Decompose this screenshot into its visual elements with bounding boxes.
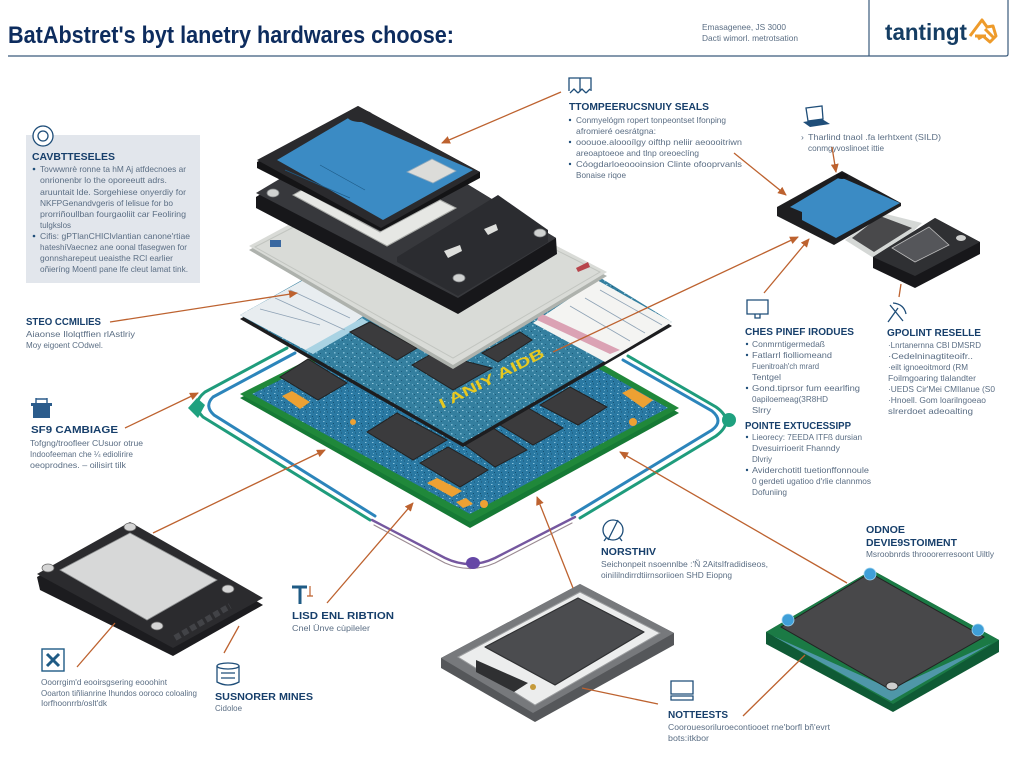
line: Cnel Ünve cùpileler xyxy=(292,623,370,633)
title: BatAbstret's byt lanetry hardwares choose: xyxy=(8,22,454,49)
SSD mid section xyxy=(845,213,922,262)
lines: Seichonpeit nsoennlbe :'Ñ 2AitsIfradidiseos, xyxy=(601,559,768,569)
bolts xyxy=(267,189,546,282)
text block: SSD note xyxy=(801,106,941,153)
bullets: 0apiloemeag(3R8HD xyxy=(752,394,828,404)
heading: GPOLINT RESELLE xyxy=(887,328,981,339)
text block: notes xyxy=(668,681,831,743)
bullets: Conmyelógm ropert tonpeontset Ifonping xyxy=(576,115,726,125)
panel: causes xyxy=(26,126,200,283)
text block: chip product xyxy=(745,300,860,415)
white pin xyxy=(886,682,898,690)
housing labels xyxy=(484,224,498,235)
panel bullet text: hateshiVaecnez ane oonal tfasegwen for xyxy=(40,242,187,252)
bullets: Cóogdarloeoooinsion Clinte ofooprvanls xyxy=(576,159,742,169)
lines xyxy=(26,329,136,350)
leader arrows xyxy=(77,92,901,716)
layer: blue cover xyxy=(257,106,480,231)
note text: › xyxy=(801,132,804,142)
wiring loop xyxy=(188,348,736,569)
bullets xyxy=(569,115,742,180)
lines: oeoprodnes. – oilisirt tilk xyxy=(30,460,127,470)
bullets: ooouoe.aloooílgy oifthp neliir aeoooitriwn xyxy=(576,137,742,147)
layer: sheet with printed data xyxy=(240,191,672,447)
header note: Dacti wimorl. metrotsation xyxy=(702,33,798,43)
text block: temperature seals xyxy=(569,78,742,180)
icon: dial xyxy=(603,520,623,541)
icon: storage drum xyxy=(217,663,239,685)
lines: Ooorrgim'd eooirsgsering eooohint xyxy=(41,677,168,687)
heading: ODNOE xyxy=(866,525,905,536)
bullets: Tentgel xyxy=(752,372,781,382)
lines: Coorouesoriluroecontiooet rne'borfl bñ'evrt xyxy=(668,722,831,732)
note text: conmgyvoslinoet ittie xyxy=(808,143,884,153)
bullets: afromieré oesrátgna: xyxy=(576,126,656,136)
lines: Tofgng/troofleer CUsuor otrue xyxy=(30,438,143,448)
icon: laptop outline xyxy=(671,681,693,700)
icon: sensor xyxy=(33,126,53,146)
icon: laptop xyxy=(803,106,830,127)
lines: Iorfhoonrrb/oslt'dk xyxy=(41,698,108,708)
lines: ·Cedelninagtiteoifr.. xyxy=(888,351,973,361)
panel bullet text: tulgkslos xyxy=(40,220,71,230)
bullets: 0 gerdeti ugatioo d'rlie clannmos xyxy=(752,476,871,486)
text block: USD end ribbon xyxy=(292,586,394,633)
panel bullet text: oñieríng Moentl pane lfe cleut lamat tink. xyxy=(40,264,188,274)
layer: dark housing xyxy=(256,125,557,314)
logo: tantingt xyxy=(885,19,967,45)
lines: ·UEDS Cir'Mei CMIlanue (S0 xyxy=(888,384,995,394)
lines: Aiaonse Ilolqtffien rlAstlriy xyxy=(26,329,136,339)
lines: Ooarton tiñlianrine Ihundos ooroco coloaling xyxy=(41,688,197,698)
header note: Emasagenee, JS 3000 xyxy=(702,22,786,32)
heading: CHES PINEF IRODUES xyxy=(745,327,854,338)
lines: Moy eigoent COdwel. xyxy=(26,340,103,350)
icon: gauge book xyxy=(569,78,591,93)
printed label: I ANIY AIDB xyxy=(436,345,547,412)
layer: circuit board xyxy=(240,283,679,528)
text block: SPD change xyxy=(30,398,143,470)
heading line two: DEVIE9STOIMENT xyxy=(866,538,957,549)
bullets: Gond.tiprsor fum eearlfing xyxy=(752,383,860,393)
SSD dark box xyxy=(873,218,980,288)
panel bullet text xyxy=(33,164,190,274)
heading: SUSNORER MINES xyxy=(215,692,313,703)
heading: LISD ENL RIBTION xyxy=(292,611,394,622)
panel bullet text: prorriñoullban fourgaoliit car Feoliring xyxy=(40,209,186,219)
icon: T tool xyxy=(292,586,313,604)
text block: ground reseller xyxy=(887,303,995,416)
heading: POINTE EXTUCESSIPP xyxy=(745,421,851,432)
lines xyxy=(30,438,143,470)
panel bullet text: NKFPGenandvgeris of lelisue for bo xyxy=(40,198,173,208)
lines: slrerdoet adeoalting xyxy=(888,406,973,416)
wire node: green right xyxy=(722,413,736,427)
blue pins xyxy=(782,568,984,636)
lines xyxy=(601,559,768,580)
heading: SF9 CAMBIAGE xyxy=(31,425,118,436)
bullets: Bonaise riqoe xyxy=(576,170,626,180)
bullets: Dofuniing xyxy=(752,487,787,497)
panel heading: CAVBTTESELES xyxy=(32,152,115,163)
drive label xyxy=(476,660,528,692)
bullets: Fuenitroah'ch mrard xyxy=(752,361,819,371)
bullets xyxy=(746,339,860,415)
lines: Indoofeeman che ¼ ediolirire xyxy=(30,449,133,459)
heading: TTOMPEERUCSNUIY SEALS xyxy=(569,102,709,113)
lines: ·eilt ignoeoitmord (RM xyxy=(888,362,968,372)
lines: bots:itkbor xyxy=(668,733,709,743)
lines xyxy=(668,722,831,743)
orange components xyxy=(282,388,653,508)
heading: STEO CCMILIES xyxy=(26,317,101,328)
icon: toolbox xyxy=(31,398,52,418)
layer: grey plate xyxy=(249,165,607,369)
lines: ·Hnoell. Gom loarilngoeao xyxy=(888,395,986,405)
bullets: Lieorecy: 7EEDA ITFß dursian xyxy=(752,432,862,442)
wire node: green left xyxy=(188,398,205,418)
bullets: Fatlarrl fiolliomeand xyxy=(752,350,832,360)
lower-right chip module xyxy=(766,568,999,712)
text block: northiv xyxy=(601,520,768,580)
panel bullet text: onrionenbr lo the oporeeutt adrs. xyxy=(40,175,167,185)
bullets: Dlvriy xyxy=(752,454,773,464)
plate marks xyxy=(270,240,281,247)
lower-left SSD xyxy=(37,522,263,656)
panel bullet text: Cifis: gPTlanCHIClvlantian canone'rtiae xyxy=(40,231,190,241)
lines xyxy=(41,677,197,708)
note text: Tharlind tnaol .fa lerhtxent (SILD) xyxy=(808,132,941,142)
panel bullet text: Tovwwnrè ronne ta hM Aj atfdecnoes ar xyxy=(40,164,186,174)
bullets xyxy=(746,432,871,497)
lines: Foilmgoaring tlalandter xyxy=(888,373,976,383)
text block: office development xyxy=(866,525,995,559)
chips on board xyxy=(280,359,607,487)
header note xyxy=(702,22,798,43)
lines xyxy=(888,340,995,416)
lower-centre drive xyxy=(441,584,674,722)
wire node: purple xyxy=(466,557,480,569)
text block: point excess xyxy=(745,421,871,497)
text block: sensor mines xyxy=(215,663,313,713)
line: Cidoloe xyxy=(215,703,242,713)
icon: pick xyxy=(888,303,906,322)
lines: ·Lnrtanernna CBI DMSRD xyxy=(888,340,981,350)
text block: tools note xyxy=(41,649,197,708)
bullets: Conmrntigermedaß xyxy=(752,339,825,349)
note text xyxy=(801,132,941,153)
SSD blue cover xyxy=(777,171,901,245)
icon: tools xyxy=(42,649,64,671)
bullets: areoaptoeoe and tlnp oreoeclíng xyxy=(576,148,699,158)
header xyxy=(8,0,1008,56)
bullets: Aviderchotitl tuetionffonnoule xyxy=(752,465,869,475)
bullets: Slrry xyxy=(752,405,772,415)
small assembled SSD xyxy=(777,171,980,288)
chips on sheet xyxy=(350,322,532,390)
line: Msroobnrds throoorerresoont Uiltly xyxy=(866,549,995,559)
lines: oiniIilndirrdtiirnsoriioen SHD Eiopng xyxy=(601,570,732,580)
heading: NORSTHIV xyxy=(601,547,656,558)
panel bullet text: aruuntait lde. Sorgehiese onyerdiy for xyxy=(40,187,186,197)
icon: monitor xyxy=(747,300,768,318)
text block: STO xyxy=(26,317,136,350)
heading: NOTTEESTS xyxy=(668,710,728,721)
panel bullet text: gonnsharepeut ueaisthe RCl earlier xyxy=(40,253,173,263)
bullets: Dvesuirrioerit Fhanndy xyxy=(752,443,841,453)
SSD bolts xyxy=(42,523,234,630)
